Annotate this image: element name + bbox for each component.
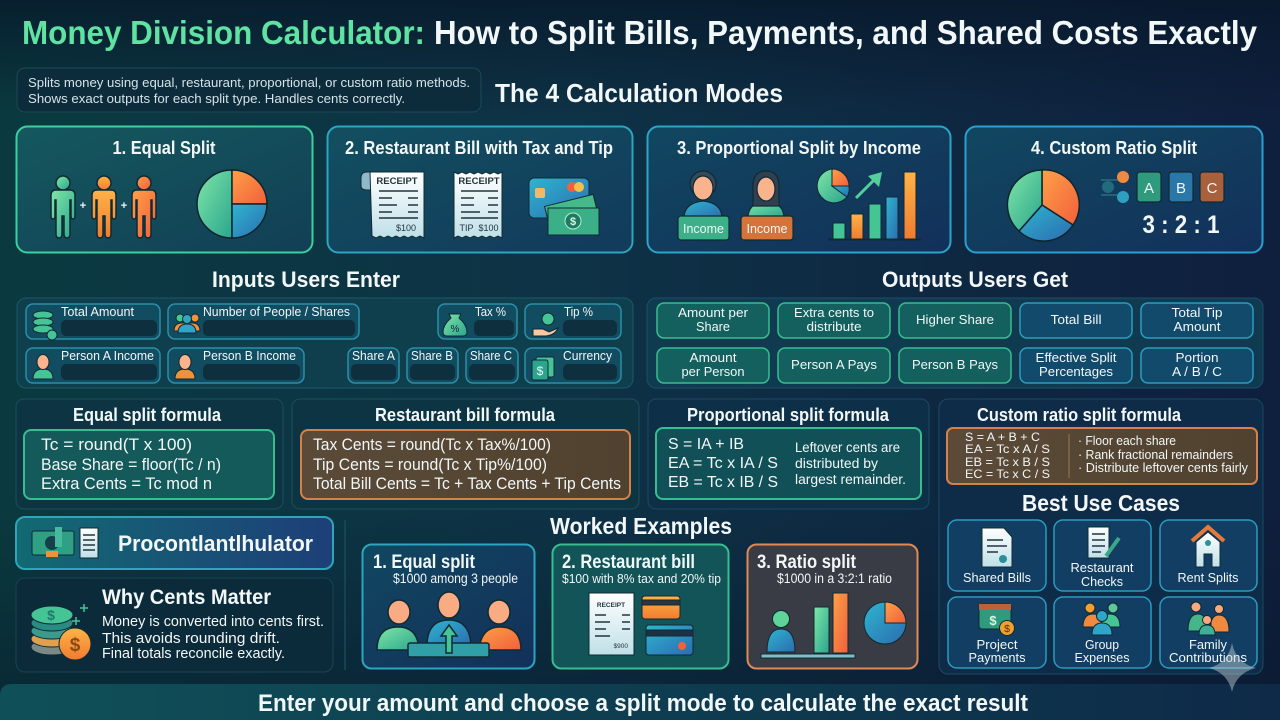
panel: custom ratio formula and use cases: Custom ratio split formula — [977, 405, 1182, 425]
icon: pie split in three — [197, 170, 267, 238]
panel: inputs: Total Amount — [61, 305, 135, 319]
panel: why cents matter: Money is converted into cents first. — [102, 614, 324, 630]
formula box: · Distribute leftover cents fairly — [1078, 461, 1249, 475]
chart: pie and rising bars — [817, 169, 921, 240]
panel: outputs: Person A Pays — [791, 357, 877, 372]
example card: equal split — [362, 544, 534, 668]
icon: coin stack: $ — [70, 635, 81, 656]
icon: pie — [864, 602, 906, 644]
panel: restaurant bill formula — [292, 399, 639, 509]
heading: the 4 calculation modes: The 4 Calculation Modes — [495, 78, 783, 108]
heading: best use cases: Best Use Cases — [1022, 490, 1180, 516]
footer call to action: Enter your amount and choose a split mode to calculate the exact result — [258, 690, 1028, 717]
icon: currency notes — [532, 357, 554, 380]
icon: receipt: RECEIPT — [597, 602, 625, 609]
panel: custom ratio formula and use cases: Group — [1085, 638, 1119, 652]
panel: proportional split formula: distributed by — [795, 456, 878, 471]
banner: calculator name: Procontlantlhulator — [118, 531, 313, 556]
panel: proportional split formula: S = IA + IB — [668, 436, 744, 453]
panel: restaurant bill formula: Tax Cents = round(Tc x Tax%/100) — [313, 436, 551, 454]
panel: proportional split formula: largest remainder. — [795, 472, 906, 487]
icon: credit card and cash — [529, 178, 599, 235]
panel: equal split: + — [80, 200, 86, 212]
panel: proportional split: 3. Proportional Split by Income — [677, 138, 921, 158]
icon: people group — [174, 314, 200, 333]
ratio blocks A B C: B — [1176, 180, 1186, 197]
icon: receipt two: RECEIPT — [458, 176, 500, 187]
panel: inputs: Number of People / Shares — [203, 305, 350, 319]
panel: equal split: + — [121, 200, 127, 212]
formula box: S = A + B + C — [965, 430, 1040, 444]
panel: custom ratio split — [966, 126, 1262, 252]
panel: outputs: Share — [696, 319, 730, 334]
formula box — [947, 428, 1257, 484]
icon: ratio pie — [1007, 170, 1079, 241]
icon: coin stack — [33, 311, 57, 340]
icon: share nodes — [1101, 171, 1129, 203]
example card: restaurant bill — [552, 544, 728, 668]
panel: inputs: Person A Income — [61, 349, 154, 363]
panel: restaurant bill formula: Restaurant bill formula — [375, 405, 556, 425]
icon: house — [1192, 527, 1224, 567]
icon: receipt one: $100 — [396, 223, 416, 233]
ratio blocks A B C — [1137, 172, 1224, 202]
formula box: EA = Tc x A / S — [965, 442, 1050, 456]
panel: inputs: Tip % — [564, 305, 593, 319]
panel: outputs: A / B / C — [1172, 364, 1222, 379]
panel: custom ratio formula and use cases: Family — [1189, 638, 1228, 652]
icon: currency notes: $ — [537, 364, 544, 378]
panel: custom ratio formula and use cases: Checks — [1081, 575, 1123, 589]
panel: equal split formula: Equal split formula — [73, 405, 222, 425]
panel: custom ratio formula and use cases: Contributions — [1169, 651, 1247, 665]
icon: tax bag — [443, 314, 467, 336]
panel: inputs — [17, 298, 633, 388]
panel: equal split — [16, 126, 312, 252]
panel: equal split: 1. Equal Split — [112, 138, 216, 158]
panel: outputs: Higher Share — [916, 312, 994, 327]
icon: person two with income tag — [741, 171, 793, 240]
title — [22, 14, 1258, 51]
ratio label: 3 : 2 : 1 — [1142, 211, 1220, 239]
panel: restaurant bill formula: Total Bill Cents = Tc + Tax Cents + Tip Cents — [313, 475, 621, 493]
title: How to Split Bills, Payments, and Shared Costs Exactly — [434, 14, 1258, 51]
panel: equal split formula: Tc = round(T x 100) — [41, 436, 192, 454]
panel: outputs — [647, 298, 1263, 388]
panel: custom ratio formula and use cases — [939, 399, 1263, 674]
icon: receipt one — [361, 172, 424, 238]
panel: outputs: Total Tip — [1172, 305, 1222, 320]
icon: sparkle watermark — [1209, 643, 1256, 692]
panel: outputs: Portion — [1176, 350, 1218, 365]
icon: credit card and cash: $ — [570, 216, 576, 228]
panel: custom ratio formula and use cases: Expenses — [1074, 651, 1130, 665]
panel: restaurant bill: 2. Restaurant Bill with Tax and Tip — [345, 138, 613, 158]
icon: two credit cards — [642, 596, 693, 655]
panel: custom ratio formula and use cases: Project — [976, 638, 1018, 652]
icon: document — [982, 528, 1012, 567]
panel: outputs: per Person — [682, 364, 744, 379]
icon: person B — [175, 354, 195, 379]
panel: outputs: Percentages — [1039, 364, 1113, 379]
icon: person with income tag — [678, 171, 729, 240]
icon: cash with receipt — [32, 527, 98, 558]
heading: inputs: Inputs Users Enter — [212, 267, 400, 292]
formula box: EC = Tc x C / S — [965, 467, 1050, 481]
panel: why cents matter — [16, 578, 333, 672]
panel: custom ratio formula and use cases: Shared Bills — [963, 571, 1031, 585]
formula box: · Rank fractional remainders — [1078, 448, 1233, 462]
icon: three people — [51, 176, 156, 238]
panel: outputs: Amount — [1174, 319, 1221, 334]
use case tiles — [948, 520, 1257, 668]
footer call to action — [0, 684, 1280, 720]
panel: proportional split formula — [648, 399, 929, 509]
panel: custom ratio split: 4. Custom Ratio Split — [1031, 138, 1197, 158]
icon: receipt — [589, 593, 634, 655]
heading: worked examples: Worked Examples — [550, 513, 732, 539]
icon: family — [1188, 602, 1229, 635]
icon: receipt: $900 — [614, 643, 628, 650]
panel: inputs: Share B — [411, 349, 453, 363]
panel: why cents matter: Final totals reconcile exactly. — [102, 646, 285, 662]
formula box: · Floor each share — [1078, 434, 1176, 448]
title: Money Division Calculator: — [22, 14, 425, 51]
example card: ratio split: $1000 in a 3:2:1 ratio — [777, 571, 892, 586]
icon: checks with pencil — [1088, 527, 1119, 558]
icon: calendar payment: $ — [1004, 623, 1010, 635]
panel: inputs: Currency — [563, 349, 613, 363]
icon: person two with income tag: Income — [746, 221, 788, 236]
example card: restaurant bill: $100 with 8% tax and 20% tip — [562, 571, 721, 586]
example card: restaurant bill: 2. Restaurant bill — [562, 552, 695, 573]
panel: restaurant bill formula: Tip Cents = round(Tc x Tip%/100) — [313, 456, 547, 474]
panel: outputs: distribute — [806, 319, 862, 334]
formula box: EB = Tc x B / S — [965, 455, 1050, 469]
heading: outputs: Outputs Users Get — [882, 267, 1069, 292]
icon: group — [1083, 603, 1120, 635]
example card: ratio split: 3. Ratio split — [757, 552, 857, 573]
panel: outputs: Extra cents to — [794, 305, 874, 320]
panel: why cents matter: This avoids rounding drift. — [102, 631, 280, 647]
chart: two bars on a base — [761, 593, 855, 658]
panel: inputs: Person B Income — [203, 349, 296, 363]
panel: outputs: Effective Split — [1036, 350, 1117, 365]
example card: equal split: $1000 among 3 people — [393, 571, 518, 586]
icon: coin stack — [31, 604, 91, 660]
panel: custom ratio formula and use cases: Restaurant — [1070, 561, 1134, 575]
panel: custom ratio formula and use cases: Rent Splits — [1178, 571, 1238, 585]
icon: tip hand — [533, 313, 558, 336]
icon: receipt two: TIP $100 — [459, 223, 499, 233]
panel: equal split formula: Base Share = floor(Tc / n) — [41, 456, 221, 474]
panel: equal split formula: Extra Cents = Tc mod n — [41, 475, 212, 493]
panel: restaurant bill — [328, 126, 632, 252]
panel: equal split formula — [16, 399, 283, 509]
panel: outputs: Person B Pays — [912, 357, 998, 372]
intro text box: Shows exact outputs for each split type. Handles cents correctly. — [28, 91, 405, 106]
icon: receipt one: RECEIPT — [376, 176, 418, 187]
icon: receipt two — [454, 172, 502, 238]
icon: tax bag: % — [451, 324, 460, 335]
icon: calendar payment: $ — [989, 613, 997, 628]
icon: three people with arrow — [377, 592, 521, 657]
example card: equal split: 1. Equal split — [373, 552, 476, 573]
panel: outputs: Amount per — [678, 305, 749, 320]
intro text box: Splits money using equal, restaurant, proportional, or custom ratio methods. — [28, 75, 470, 90]
panel: proportional split formula: Leftover cents are — [795, 440, 900, 455]
panel: outputs: Amount — [690, 350, 737, 365]
intro text box — [17, 68, 481, 112]
panel: proportional split formula: Proportional split formula — [687, 405, 890, 425]
panel: why cents matter: Why Cents Matter — [102, 586, 271, 609]
ratio blocks A B C: A — [1144, 180, 1154, 197]
icon: person — [767, 610, 795, 652]
icon: person A — [33, 354, 53, 379]
panel: custom ratio formula and use cases: Payments — [968, 651, 1026, 665]
banner: calculator name — [16, 517, 333, 569]
panel: proportional split formula: EA = Tc x IA / S — [668, 455, 778, 472]
panel: outputs: Total Bill — [1050, 312, 1102, 327]
panel: inputs: Share A — [352, 349, 396, 363]
icon: coin stack: $ — [47, 607, 55, 623]
ratio blocks A B C: C — [1207, 180, 1218, 197]
panel: inputs: Tax % — [475, 305, 506, 319]
icon: person with income tag: Income — [683, 221, 724, 236]
panel: proportional split formula: EB = Tc x IB / S — [668, 474, 778, 491]
example card: ratio split — [748, 544, 918, 668]
panel: inputs: Share C — [470, 349, 512, 363]
panel: proportional split — [648, 126, 950, 252]
icon: calendar payment — [979, 604, 1014, 636]
